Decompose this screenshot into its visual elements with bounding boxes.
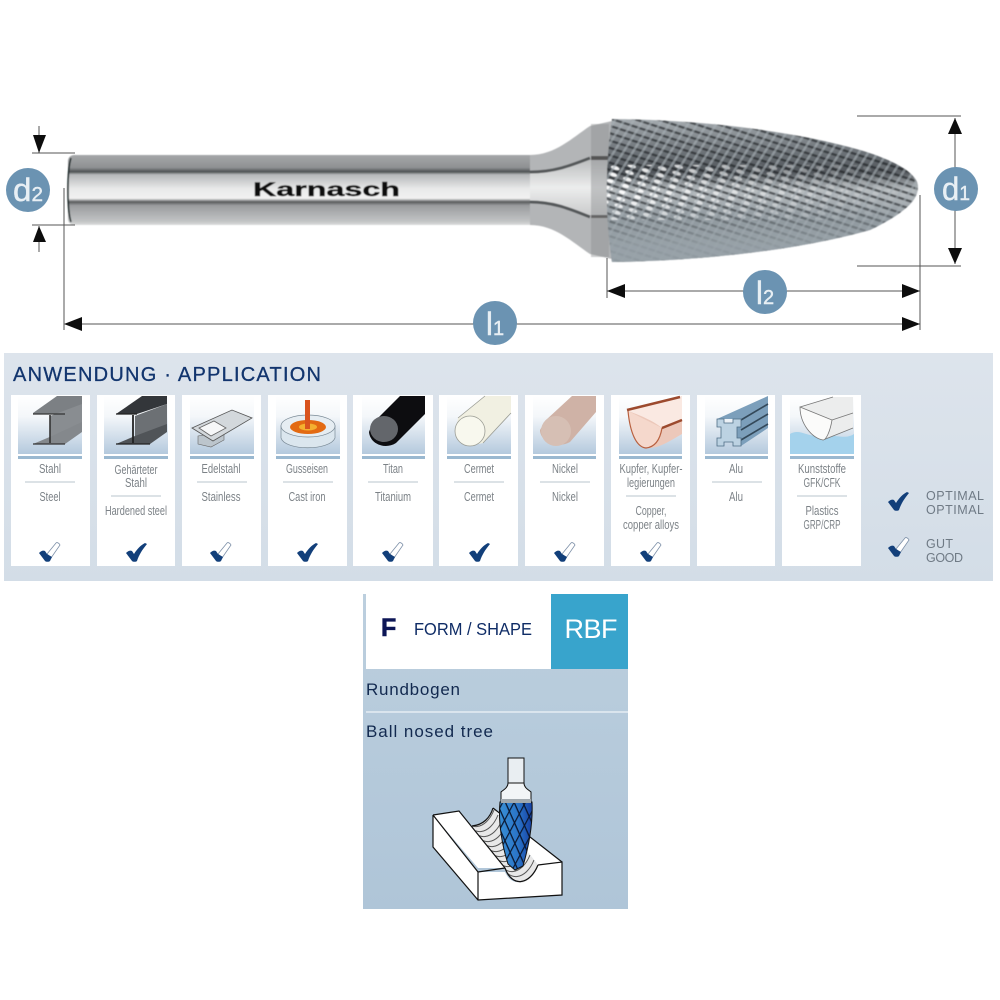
german name: Rundbogen — [366, 680, 460, 699]
form label: FORM / SHAPE — [414, 619, 532, 639]
drill bit tool — [68, 115, 925, 265]
panel: form / shape — [363, 594, 628, 909]
brand name: Karnasch — [253, 180, 400, 201]
card: nickel: Nickel — [552, 489, 578, 504]
card: hardened steel — [97, 395, 175, 566]
card: titanium — [353, 395, 433, 566]
dimension arrowheads — [33, 118, 962, 331]
card: cermet: Cermet — [464, 461, 494, 476]
legend: optimal: OPTIMAL — [926, 489, 984, 503]
label l2: l2 — [756, 275, 774, 311]
card: copper: legierungen — [627, 475, 675, 490]
card: steel: Steel — [40, 489, 61, 504]
card: cast iron — [268, 395, 347, 566]
label d2: d2 — [13, 172, 43, 208]
card: nickel: Nickel — [552, 461, 578, 476]
card: cermet: Cermet — [464, 489, 494, 504]
card: titanium: Titan — [383, 461, 403, 476]
neck — [530, 121, 612, 259]
legend: optimal — [888, 489, 984, 517]
card: aluminium: Alu — [729, 489, 743, 504]
shape code — [551, 594, 628, 669]
card: hardened steel: Gehärteter — [114, 462, 158, 477]
card: hardened steel: Hardened steel — [105, 503, 167, 518]
legend: good: GUT — [926, 537, 953, 551]
card: steel — [11, 395, 90, 566]
card: plastics: GFK/CFK — [804, 475, 841, 490]
card: steel: Stahl — [39, 461, 61, 476]
card: plastics: Plastics — [806, 503, 839, 518]
label d2 — [6, 168, 50, 212]
label l2 — [743, 270, 787, 314]
application heading: ANWENDUNG · APPLICATION — [13, 364, 321, 386]
label l1: l1 — [486, 306, 504, 342]
card: hardened steel: Stahl — [125, 475, 147, 490]
card: plastics — [782, 395, 861, 566]
shank — [68, 155, 538, 225]
english name: Ball nosed tree — [366, 722, 493, 741]
card: copper: Kupfer, Kupfer- — [620, 461, 682, 476]
panel: application — [4, 353, 993, 581]
illustration: burr cutting a workpiece — [433, 758, 562, 900]
card: stainless: Edelstahl — [202, 461, 241, 476]
form letter: F — [381, 614, 396, 642]
card: plastics: Kunststoffe — [798, 461, 846, 476]
cutter head — [600, 115, 925, 265]
card: aluminium — [697, 395, 775, 566]
label l1 — [473, 301, 517, 345]
dimension lines — [32, 116, 961, 330]
legend: good — [888, 537, 963, 565]
card: cast iron: Gusseisen — [286, 461, 328, 476]
card: stainless: Stainless — [202, 489, 241, 504]
card: stainless — [182, 395, 261, 566]
card: copper — [611, 395, 690, 566]
card: cermet — [439, 395, 518, 566]
shape code: RBF — [564, 614, 618, 644]
legend: good: GOOD — [926, 551, 963, 565]
card: titanium: Titanium — [375, 489, 411, 504]
card: plastics: GRP/CRP — [804, 517, 840, 532]
label d1: d1 — [942, 171, 970, 207]
legend: optimal: OPTIMAL — [926, 503, 984, 517]
card: copper: copper alloys — [623, 517, 679, 532]
card: cast iron: Cast iron — [288, 489, 326, 504]
card: nickel — [525, 395, 604, 566]
card: aluminium: Alu — [729, 461, 743, 476]
label d1 — [934, 167, 978, 211]
card: copper: Copper, — [636, 503, 666, 518]
